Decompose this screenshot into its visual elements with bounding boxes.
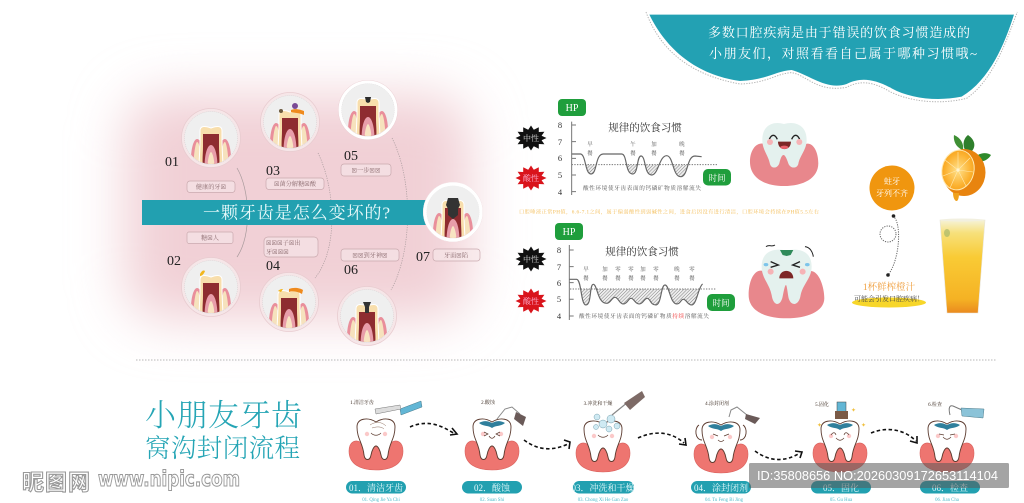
pinyin: 01. Qing Jie Ya Chi <box>362 498 400 503</box>
axis numbers: 7 <box>557 262 561 272</box>
title: pit and fissure sealing: 窝沟封闭流程 <box>145 434 300 463</box>
step 1: cleaning <box>346 399 422 503</box>
meal labels: 餐 <box>602 274 608 282</box>
meal labels: 餐 <box>674 274 680 282</box>
icon: curing lamp: ✦ <box>851 407 856 414</box>
icon: applicator tool <box>729 407 760 424</box>
handwritten note: 2.酸蚀 <box>481 399 496 406</box>
label 05: ☒一步☒☒ <box>351 166 381 174</box>
chart caption: 酸性环境使牙齿表面的钙磷矿物质持续溶解流失 <box>579 312 709 320</box>
label 01: 健康的牙☒ <box>196 183 226 191</box>
label 07: 牙面☒陷 <box>444 252 468 260</box>
top callout banner: 小朋友们，对照看看自己属于哪种习惯哦~ <box>709 46 977 62</box>
icon: curing lamp: ✦ <box>861 422 866 429</box>
meal labels: 餐 <box>587 149 593 157</box>
orange circle callout: 蛀牙 <box>884 176 900 186</box>
heading banner <box>142 200 427 225</box>
orange circle callout <box>870 166 914 210</box>
meal labels: 晚 <box>674 265 680 273</box>
time badge <box>707 294 735 311</box>
number 05: 05 <box>344 149 358 164</box>
happy tooth illustration <box>750 123 818 186</box>
heading banner: 一颗牙齿是怎么变坏的? <box>203 204 390 222</box>
crying tooth illustration <box>749 245 824 318</box>
number 04: 04 <box>266 259 280 274</box>
label 07 <box>433 249 480 261</box>
juice text: 1杯鲜榨橙汁 <box>863 281 916 293</box>
step pill: 06．检查 <box>932 482 968 493</box>
panel: frequent eating habit chart <box>516 223 735 321</box>
pH line chart <box>569 245 717 320</box>
yellow highlight <box>852 298 926 308</box>
step 03 tooth icon <box>260 92 320 152</box>
step 02 tooth icon <box>182 258 240 317</box>
title: pit and fissure sealing <box>145 398 302 463</box>
background glow: pink area <box>125 95 470 320</box>
step pill: 05．固化 <box>823 482 859 493</box>
label 01 <box>187 181 235 192</box>
label 04 <box>264 237 318 257</box>
pinyin: 05. Gu Hua <box>830 498 853 503</box>
time badge <box>703 169 731 186</box>
pinyin: 06. Jian Cha <box>935 498 960 503</box>
meal labels: 零 <box>689 265 695 273</box>
meal labels: 餐 <box>640 274 646 282</box>
orange circle callout: 牙列不齐 <box>876 188 908 198</box>
step 2: etching <box>462 399 526 503</box>
label 06 <box>341 249 399 261</box>
HP badge <box>555 223 583 240</box>
dotted connector <box>880 214 899 277</box>
watermark: ID box <box>749 463 1009 488</box>
watermark: ID box: ID:35808656 NO:20260309172653114104 <box>757 468 998 483</box>
step pill: 03．冲洗和干燥 <box>571 482 635 493</box>
meal labels: 餐 <box>615 274 621 282</box>
meal labels <box>587 140 685 157</box>
arrow 5 <box>871 430 917 443</box>
handwritten note: 6.检查 <box>928 401 942 408</box>
arrow 2 <box>524 440 570 449</box>
axis numbers: 5 <box>557 294 561 304</box>
tooth illustration <box>694 422 748 473</box>
foam bubbles <box>594 414 620 432</box>
icon: rinse tool <box>612 391 645 415</box>
meal labels: 零 <box>653 265 659 273</box>
acid badge <box>516 288 546 314</box>
meal labels: 餐 <box>583 274 589 282</box>
HP badge <box>558 99 586 116</box>
step 6: inspection <box>920 401 984 503</box>
arrow 3 <box>638 433 686 445</box>
meal labels: 早 <box>587 140 593 148</box>
step pill: 04．涂封闭剂 <box>694 482 748 493</box>
panel: how a tooth decays <box>142 80 483 346</box>
meal labels: 加 <box>651 140 657 148</box>
chart title: 规律的饮食习惯 <box>608 121 682 134</box>
meal labels: 餐 <box>679 149 685 157</box>
label 02 <box>187 232 233 244</box>
step 05 tooth icon <box>338 80 398 140</box>
meal labels: 餐 <box>630 149 636 157</box>
pinyin: 02. Suan Shi <box>480 498 505 503</box>
number 07: 07 <box>416 250 430 265</box>
info note: 口腔唾液正常PH值，6.6-7.1之间，属于偏弱酸性到弱碱性之间，进食后因没有进行清洁，口腔环境会持续在PH值5.5左右 <box>519 208 819 216</box>
neutral badge <box>516 126 546 150</box>
label 03 <box>266 178 324 190</box>
axis numbers <box>557 245 562 321</box>
chart title: 规律的饮食习惯 <box>605 245 679 258</box>
meal labels: 午 <box>630 140 636 148</box>
meal labels: 餐 <box>689 274 695 282</box>
time badge: 时间 <box>708 173 726 183</box>
number 03: 03 <box>266 164 280 179</box>
label 03: ☒菌分解糖☒酸 <box>274 180 317 188</box>
HP badge: HP <box>563 227 576 238</box>
step pill: 01．清洁牙齿 <box>349 482 403 493</box>
axis numbers: 6 <box>558 153 562 163</box>
number 02: 02 <box>167 254 181 269</box>
tooth illustration <box>920 421 974 472</box>
axis numbers: 6 <box>557 278 561 288</box>
meal labels: 零 <box>615 265 621 273</box>
icon: orange fruit <box>938 135 991 201</box>
meal labels: 餐 <box>653 274 659 282</box>
step 04 tooth icon <box>260 272 318 332</box>
step 5: curing <box>811 401 871 503</box>
number 06: 06 <box>344 263 358 278</box>
watermark: site name: www.nipic.com <box>98 467 240 491</box>
warning text: 可能会引发口腔疾病！ <box>854 294 924 303</box>
meal labels: 零 <box>628 265 634 273</box>
panel: regular eating habit chart <box>516 99 731 197</box>
axis numbers: 4 <box>557 311 562 321</box>
top callout banner: 多数口腔疾病是由于错误的饮食习惯造成的 <box>708 25 970 40</box>
meal labels: 晚 <box>679 140 685 148</box>
axis numbers: 4 <box>558 187 563 197</box>
handwritten note: 3.冲洗和干燥 <box>584 400 612 407</box>
tooth illustration <box>576 421 630 472</box>
label 04: 牙☒☒☒ <box>266 248 289 256</box>
handwritten note: 5.固化 <box>815 401 829 408</box>
icon: toothbrush <box>375 401 422 415</box>
time badge: 时间 <box>712 298 730 308</box>
neutral badge: 中性 <box>523 254 539 264</box>
pinyin: 03. Chong Xi He Gan Zao <box>578 498 629 503</box>
pH line chart <box>572 122 718 195</box>
step 07 tooth icon <box>423 182 483 242</box>
tooth illustration <box>813 421 867 472</box>
chart caption: 酸性环境使牙齿表面的钙磷矿物质溶解流失 <box>583 184 701 192</box>
label 02: 糖☒人 <box>201 234 219 242</box>
meal labels <box>583 265 695 282</box>
HP badge: HP <box>566 103 579 114</box>
tooth illustration <box>349 419 403 470</box>
step 01 tooth icon <box>182 108 240 168</box>
axis numbers: 8 <box>558 120 562 130</box>
arrow 1 <box>410 423 457 435</box>
meal labels: 早 <box>583 265 589 273</box>
step 06 tooth icon <box>338 286 396 346</box>
connecting arcs <box>237 138 408 290</box>
meal labels: 餐 <box>628 274 634 282</box>
meal labels: 餐 <box>651 149 657 157</box>
top callout banner <box>646 12 1017 102</box>
icon: curing lamp <box>817 402 866 429</box>
icon: dental probe <box>949 406 984 418</box>
label 04: ☒☒☒子☒出 <box>266 239 301 247</box>
title: pit and fissure sealing: 小朋友牙齿 <box>145 398 302 433</box>
acid badge: 酸性 <box>523 173 539 183</box>
step 4: apply sealant <box>691 400 760 503</box>
label 06: ☒☒到牙神☒ <box>352 252 388 260</box>
axis numbers: 8 <box>557 245 561 255</box>
handwritten note: 4.涂封闭剂 <box>705 400 729 407</box>
watermark: site name: 昵图网 <box>22 465 90 497</box>
step 3: rinse and dry <box>571 391 645 503</box>
pinyin: 04. Tu Feng Bi Jing <box>705 498 744 503</box>
icon: etching tool <box>497 407 526 426</box>
axis numbers: 5 <box>558 170 562 180</box>
acid badge: 酸性 <box>523 296 539 306</box>
label 05 <box>341 164 391 176</box>
tooth illustration <box>465 419 519 470</box>
icon: juice cup <box>940 218 985 313</box>
icon: curing lamp: ✦ <box>817 422 822 429</box>
axis numbers <box>558 120 563 197</box>
axis numbers: 7 <box>558 137 562 147</box>
neutral badge: 中性 <box>523 133 539 143</box>
meal labels: 加 <box>602 265 608 273</box>
panel: orange juice warning <box>852 135 991 313</box>
handwritten note: 1.清洁牙齿 <box>350 399 374 406</box>
arrow 4 <box>755 451 802 460</box>
acid badge <box>516 166 546 190</box>
step pill: 02．酸蚀 <box>474 482 511 493</box>
number 01: 01 <box>165 155 179 170</box>
watermark: site name <box>22 465 240 497</box>
neutral badge <box>516 246 546 272</box>
meal labels: 加 <box>640 265 646 273</box>
